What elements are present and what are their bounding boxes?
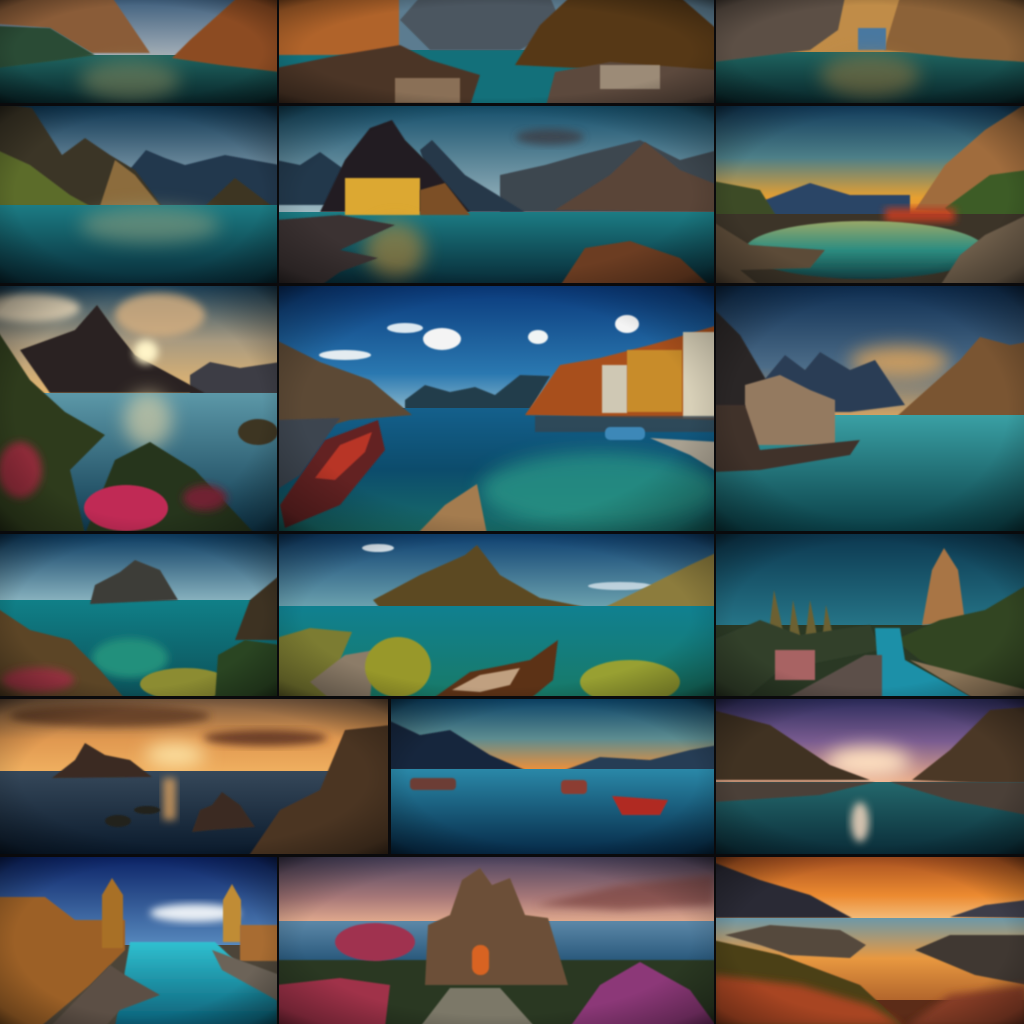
snowy mountains [760,352,905,412]
left mountains [276,152,345,205]
vignette [279,534,714,696]
right distant hills [950,900,1024,918]
right tower [223,884,241,942]
water [279,212,714,283]
distant mountains [190,362,280,394]
dock and boats [276,215,395,286]
shrubs and shore [0,26,95,68]
pink flowers [84,485,168,531]
yellow buildings [345,178,420,215]
water [279,50,714,103]
grey mountains [400,0,562,50]
small cloud [387,323,423,333]
main mountain [20,305,205,393]
teal shallows [480,452,720,528]
vignette [716,699,1024,854]
sky [0,857,277,952]
left green hillside [0,330,105,534]
right buildings [525,325,718,420]
sea rocks [192,792,255,832]
left hills [713,181,782,225]
green shrub [215,640,280,699]
shore with red flowers [716,214,1024,283]
red flowers [2,668,74,692]
panel: yellow lakeside village under dark peak [279,106,714,283]
right mountains [565,745,718,771]
right bank [910,660,1024,699]
right forest [895,585,1024,699]
water [0,600,277,696]
right flower bank [905,985,1024,1024]
rock ledge [310,650,375,699]
left dock [276,418,340,490]
distant mountains [405,375,550,410]
sky [279,534,714,609]
ground base [0,945,277,1024]
boat centre [561,780,587,794]
castle [425,868,568,985]
panel: lake with cliff and harbor buildings [0,0,277,103]
dark cloud right [203,730,327,746]
yellow building [627,350,682,412]
distant blue mountains [125,150,280,206]
sky [0,0,277,60]
central dark peak [320,120,470,212]
panel: rock spires, river and pier [716,534,1024,696]
red boat [280,420,385,528]
panel: orange village, peaks and moored boats [279,0,714,103]
right hill [595,552,718,618]
brown ridge [555,142,718,212]
left rocks [725,925,866,958]
pale rocks detail [395,78,460,103]
vignette [279,286,714,531]
right cliff [915,103,1024,215]
vignette [0,286,277,531]
left bank [713,940,905,1024]
vignette [716,106,1024,283]
foreground boats right [546,62,718,106]
quay right [212,950,280,1002]
foreground bush [580,660,680,704]
clouds right [588,582,652,590]
panel: amber sunset lake with flowers [716,857,1024,1024]
clouds [150,904,240,922]
rock [417,484,487,534]
sun reflection [124,392,172,448]
ground base [716,625,1024,696]
left dark mountain [713,308,775,420]
small clouds [362,544,394,552]
cloud band [319,350,371,360]
blue and white boats [605,427,645,440]
cloud right [615,315,639,333]
left mountains [388,720,525,770]
reflection [851,802,869,842]
cloud [516,129,584,145]
white building [683,332,718,418]
harbor buildings [172,0,280,72]
pale building [602,365,627,413]
boat interior [452,668,520,692]
right brown hills [895,337,1024,420]
back ridge [420,140,525,212]
sky [279,857,714,925]
sky [279,106,714,216]
clouds centre [115,293,205,337]
vignette [716,857,1024,1024]
left mountain [713,710,870,780]
right mountain [912,707,1024,785]
vignette [0,106,277,283]
flower field left [276,978,390,1024]
orange building [276,0,399,55]
vignette [279,106,714,283]
flower field right [570,962,717,1024]
cloud centre [423,328,461,350]
right cliff [248,725,391,857]
water [0,205,277,283]
orange cloud streak [535,875,714,910]
wooden boat [432,640,558,699]
vignette [0,0,277,103]
flowers [885,208,955,222]
island [90,560,178,604]
water [391,769,714,854]
clouds left [0,294,80,322]
boat left [410,778,456,790]
vignette [279,857,714,1024]
sky [0,699,388,773]
sky [279,0,714,60]
vignette [0,699,388,854]
left dark mountain [713,862,852,918]
left buildings [276,340,412,440]
sky [0,534,277,602]
left rocks and shrub [276,628,370,699]
left cliff [713,0,845,62]
path [420,988,535,1024]
panel: boats on blue bay at dusk [391,699,714,854]
small rock [105,815,131,827]
sky [716,534,1024,634]
sky [716,286,1024,421]
pier [785,655,882,699]
rock islet [238,419,278,445]
rock spire [922,548,965,625]
pink kiosk [775,650,815,680]
sky [279,286,714,411]
red boat right [612,796,668,815]
bright horizon [826,747,910,777]
sky [716,106,1024,221]
panel: castle on coast with flowers [279,857,714,1024]
water [279,408,714,531]
sunset glow [850,346,950,378]
vignette [0,534,277,696]
small dark hill [205,178,272,206]
left cliff [0,0,150,53]
left shore with flowers [0,608,125,699]
stone house [745,375,835,445]
foreground shrubs [85,442,255,534]
blue mountains [765,183,910,216]
boat interior [315,432,372,480]
building reflection [365,222,425,278]
panel: stone house on turquoise bay [716,286,1024,531]
right rock [235,575,280,640]
small rock right [134,806,160,814]
small cloud right [528,330,548,344]
sun [134,340,158,364]
vignette [716,286,1024,531]
water [745,221,985,279]
pink flowers left [335,923,415,961]
left tower [102,878,123,948]
vignette [0,857,277,1024]
light on water [80,60,180,100]
right rocks [915,935,1024,985]
island [52,743,152,778]
quay right [650,438,718,472]
flower bank [713,975,905,1024]
red roofs and jetty [713,405,860,472]
left forest [713,620,880,699]
left shoreline [713,782,875,802]
right shoreline [890,782,1024,815]
sea [279,921,714,971]
green slopes [0,150,90,206]
right cliff [884,0,1024,62]
panel: glowing turquoise canal town [0,857,277,1024]
yellow shrubs [140,668,230,700]
left mountain [0,103,162,206]
panel: sunset pond with cliff and rocks [716,106,1024,283]
panel: green mountain and wooden boat [279,534,714,696]
panel: canyon lake with stone arch [716,0,1024,103]
river [875,628,975,699]
panel: purple sunset between mountains [716,699,1024,854]
water [716,918,1024,1008]
red flowers left [0,442,42,498]
water [716,782,1024,854]
tree spires [768,590,834,645]
stone arch [858,28,886,50]
brown roof and hillside houses [420,183,470,215]
vignette [716,534,1024,696]
water [0,771,388,854]
castle door [472,945,489,975]
green slope [945,170,1024,225]
main mountain [373,545,590,608]
vignette [279,0,714,103]
red flowers right [183,485,227,511]
quay left [50,965,160,1024]
water [716,415,1024,531]
sky [0,106,277,206]
sun reflection [163,778,176,820]
sky [0,286,277,396]
right building [515,0,718,75]
water [279,606,714,696]
water [716,52,1024,103]
water [115,942,277,1024]
sun glow [145,743,205,767]
reflection [80,207,220,243]
moored boats [535,416,718,432]
sky [716,0,1024,55]
panel: colorful harbor with red boat [279,286,714,531]
vignette [391,699,714,854]
sky [716,857,1024,921]
water [0,393,277,531]
pale boat detail [600,65,660,89]
ground base [716,1000,1024,1024]
panel: sunburst behind mountain with pink flowers [0,286,277,531]
right rocks [940,215,1024,286]
panel: turquoise lake with green mountain [0,106,277,283]
sky [716,699,1024,784]
foreground rocks left [276,45,480,106]
right buildings [240,925,280,961]
sky [391,699,714,771]
left buildings [0,897,125,1024]
reflections [820,53,920,97]
water [0,55,277,103]
left rocks [713,222,825,286]
sunlit slope [100,160,160,206]
foreground rock [560,241,710,286]
vignette [716,0,1024,103]
yellow bush [365,637,431,697]
ground [276,960,717,1024]
right mountains [500,140,718,212]
panel: rocky island over coral bay [0,534,277,696]
coral reef [92,638,168,678]
panel: orange sunset sea with rocks [0,699,388,854]
dark cloud left [10,705,210,727]
